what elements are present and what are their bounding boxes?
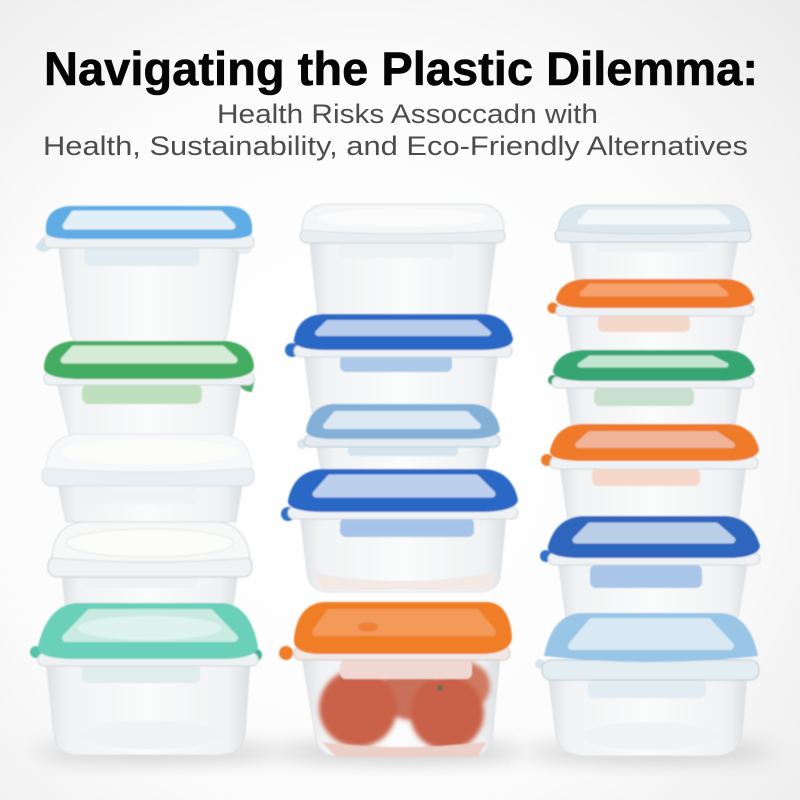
container: orange lid [548, 279, 754, 354]
column 1: stacked containers [30, 206, 262, 755]
container: pale blue lid [535, 613, 759, 756]
tomatoes [319, 662, 490, 750]
container: royal blue lid, deep [281, 469, 518, 592]
subtitle [43, 99, 748, 161]
container: royal blue lid [540, 516, 760, 618]
container: royal blue lid [285, 314, 513, 412]
column 2: stacked containers [279, 204, 518, 757]
container: blue lid [35, 206, 254, 345]
container: clear lid, lower [48, 522, 252, 612]
container: orange lid with tomatoes [279, 602, 512, 757]
container: clear lid with blue rim [555, 205, 751, 284]
container: clear lid [42, 434, 254, 522]
column 3: stacked containers [535, 205, 760, 756]
container: clear lid [300, 204, 505, 318]
container: teal lid [30, 603, 262, 755]
container: green lid [548, 350, 755, 430]
title: Navigating the Plastic Dilemma: [44, 42, 758, 95]
subtitle: Health Risks Assoccadn with [217, 99, 598, 129]
container: orange lid, tall [541, 424, 759, 522]
container: green lid [44, 341, 255, 442]
subtitle: Health, Sustainability, and Eco-Friendly Alternatives [43, 131, 748, 161]
container: light blue lid [297, 404, 500, 474]
